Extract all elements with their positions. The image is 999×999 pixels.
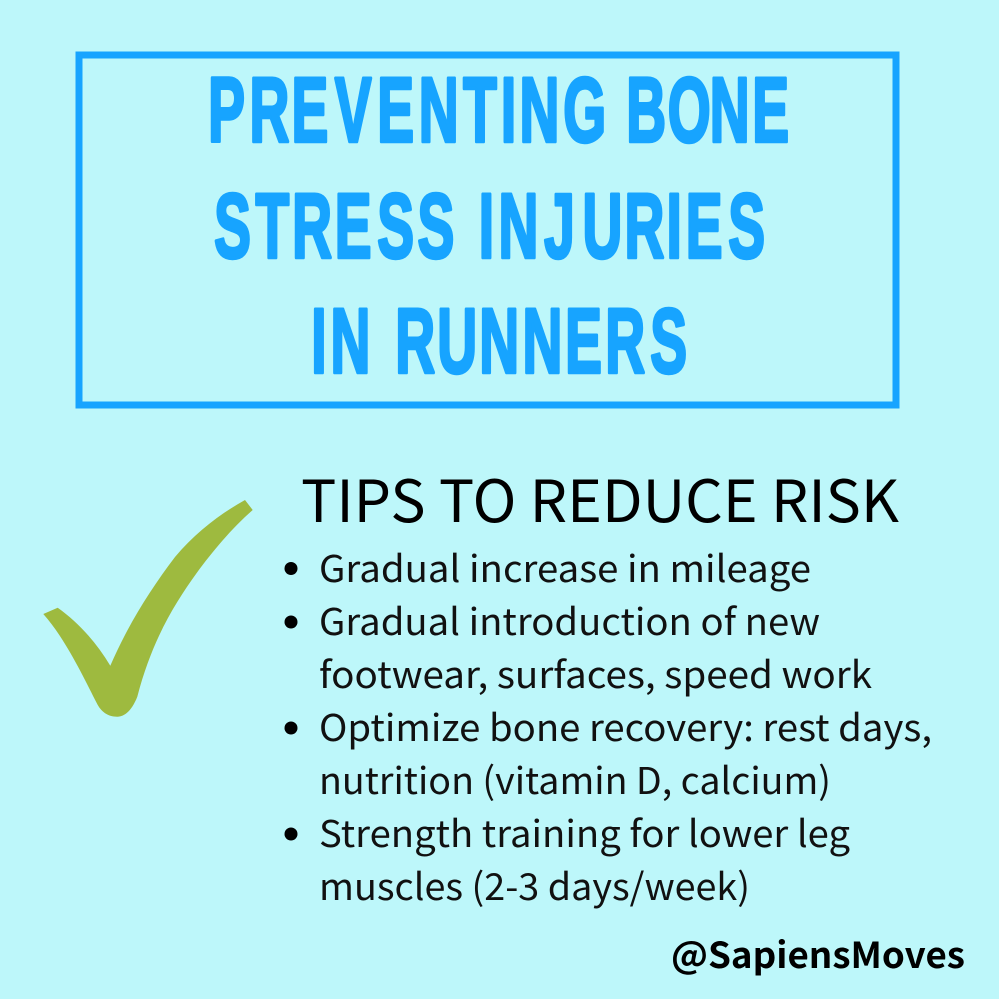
title text [208, 59, 789, 393]
tips list: Strength training for lower leg [319, 804, 850, 858]
tips list: nutrition (vitamin D, calcium) [319, 751, 831, 805]
tips list: footwear, surfaces, speed work [319, 645, 873, 699]
subheading: TIPS TO REDUCE RISK [301, 455, 900, 539]
tips list: Gradual introduction of new [319, 592, 820, 646]
title text: PREVENTING BONE [208, 59, 789, 162]
icon: check mark [43, 500, 253, 717]
handle credit: @SapiensMoves [671, 927, 965, 979]
title text: IN RUNNERS [311, 290, 687, 393]
title panel [79, 55, 896, 405]
bullet markers [284, 562, 298, 840]
tips list: muscles (2-3 days/week) [319, 857, 750, 911]
title text: STRESS INJURIES [214, 175, 765, 278]
tips list [284, 539, 932, 911]
tips list: Optimize bone recovery: rest days, [319, 698, 932, 752]
tips list: Gradual increase in mileage [319, 539, 811, 593]
